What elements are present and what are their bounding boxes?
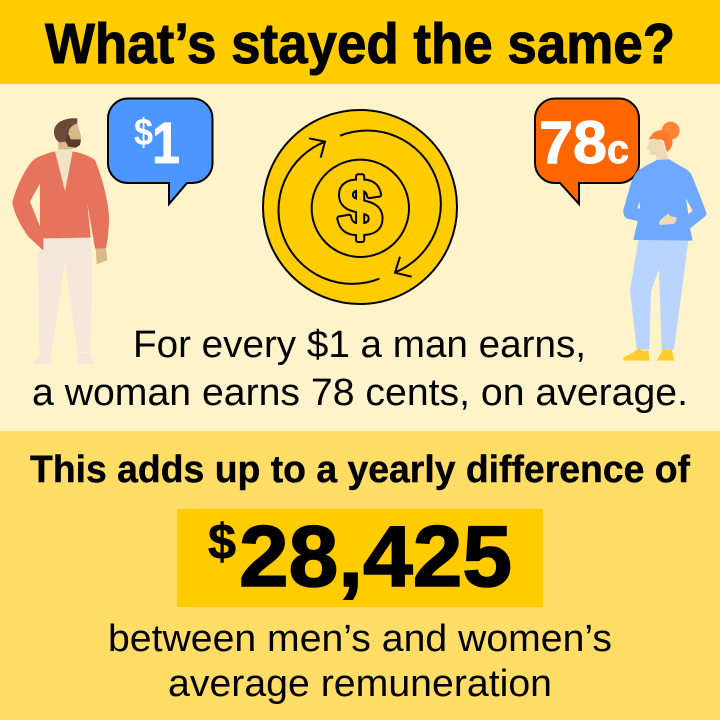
- icon: woman: [623, 122, 707, 361]
- icon: man: [12, 118, 109, 364]
- icon: coin with arrows: [263, 110, 457, 304]
- panel: pay comparison: [0, 84, 720, 431]
- callout: amount: $: [208, 514, 236, 570]
- icon: speech bubble 78c: [535, 98, 639, 204]
- bubble text: $: [134, 112, 153, 154]
- text block: remuneration: between men’s and women’s: [108, 618, 612, 660]
- text block: comparison: [32, 324, 688, 414]
- bubble text: 1: [152, 111, 180, 176]
- icon: dollar sign: $: [338, 163, 382, 251]
- icon: dollar sign: $: [338, 163, 382, 251]
- panel: yearly difference: [0, 431, 720, 720]
- title: What’s stayed the same?: [45, 12, 675, 76]
- icon: speech bubble $1: [108, 98, 213, 204]
- text block: remuneration: average remuneration: [168, 663, 552, 705]
- panel: header: [0, 0, 720, 84]
- text block: remuneration: [108, 618, 612, 705]
- text block: comparison: a woman earns 78 cents, on average.: [32, 372, 688, 414]
- bubble text: c: [607, 126, 629, 172]
- heading: This adds up to a yearly difference of: [30, 449, 690, 491]
- bubble text: 78: [539, 109, 607, 176]
- bubble text: [134, 111, 180, 176]
- callout: amount: 28,425: [239, 509, 512, 605]
- text block: comparison: For every $1 a man earns,: [133, 324, 586, 366]
